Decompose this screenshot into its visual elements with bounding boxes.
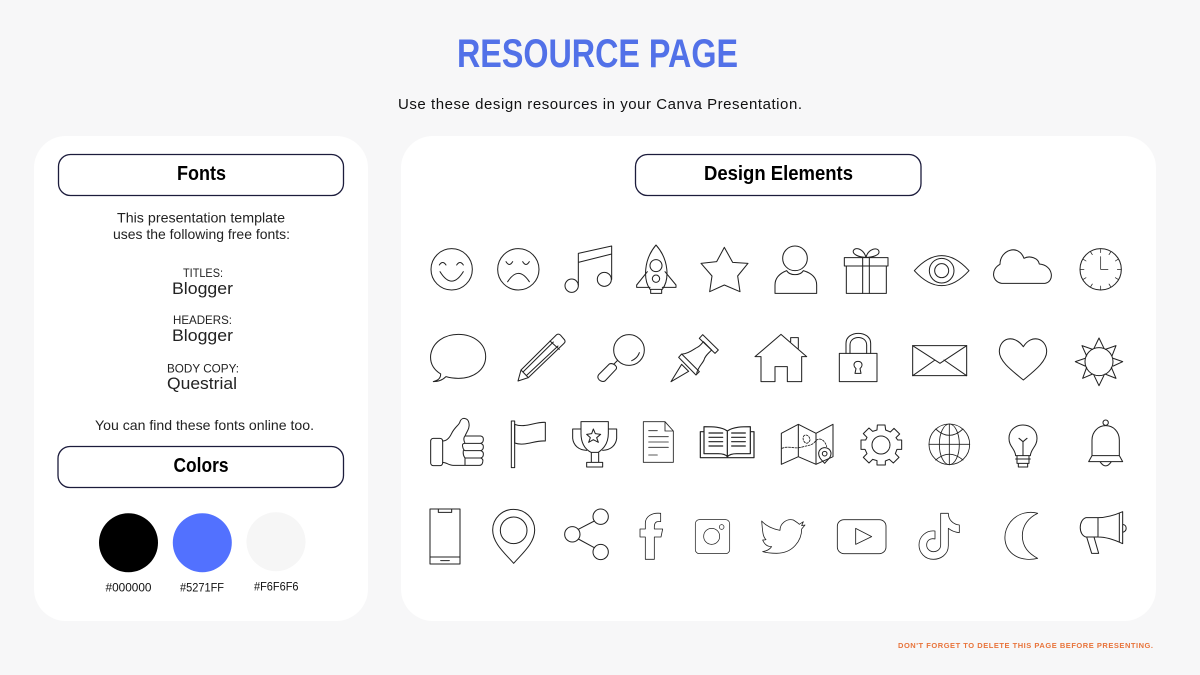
icon: pencil	[518, 334, 565, 381]
icon row 1 right	[755, 246, 1123, 386]
text: titles font: Blogger	[172, 279, 233, 298]
icon: map	[781, 424, 833, 464]
swatch: black	[99, 513, 158, 595]
icon: tiktok	[919, 513, 959, 559]
text: body font: BODY COPY:	[167, 362, 239, 376]
swatch: blue	[173, 513, 232, 595]
swatch: light grey	[246, 512, 306, 594]
icon: star	[701, 247, 748, 292]
icon: globe	[929, 424, 970, 465]
swatch: blue: #5271FF	[180, 581, 224, 595]
icon: open book	[700, 427, 754, 458]
icon: clock	[1080, 249, 1121, 290]
icon row 1 left	[431, 245, 748, 382]
icon: gift	[844, 249, 888, 293]
heading: design elements	[636, 154, 921, 196]
text: font intro: This presentation template	[117, 210, 285, 226]
icon: smile	[431, 249, 472, 290]
icon: phone	[430, 509, 460, 564]
icon: instagram	[695, 520, 730, 554]
text: font intro	[113, 210, 290, 242]
icon: location pin	[493, 509, 535, 563]
swatch: light grey: #F6F6F6	[254, 580, 299, 594]
icon: sun	[1075, 338, 1123, 386]
text: fonts note: You can find these fonts online too.	[95, 417, 314, 433]
icon: crescent moon	[1005, 512, 1038, 559]
icon: eye	[914, 256, 969, 286]
text: headers font: Blogger	[172, 326, 233, 345]
heading: colors	[58, 446, 344, 488]
icon row 2 and 3 left	[430, 418, 754, 564]
icon: person	[775, 246, 817, 293]
panel: design elements	[401, 136, 1156, 621]
text: font intro: uses the following free fonts:	[113, 226, 290, 242]
icon: megaphone	[1080, 512, 1126, 553]
icon: magnifier	[598, 335, 644, 382]
icon: document	[643, 422, 673, 462]
icon: heart	[999, 339, 1047, 380]
icon: trophy	[573, 422, 617, 467]
heading: fonts: Fonts	[177, 163, 226, 185]
icon: gear	[861, 425, 902, 465]
icon: twitter bird	[762, 520, 805, 553]
icon: share	[565, 509, 608, 560]
text: titles font	[172, 266, 233, 298]
icon: rocket	[637, 245, 676, 293]
icon row 2 and 3 right	[762, 420, 1126, 559]
text: body font: Questrial	[167, 374, 237, 393]
icon: house	[755, 334, 807, 382]
text: headers font	[172, 313, 233, 345]
footer note: DON'T FORGET TO DELETE THIS PAGE BEFORE PRESENTING.	[898, 641, 1153, 650]
text: titles font: TITLES:	[183, 266, 223, 280]
icon: video play	[837, 520, 886, 554]
icon: light bulb	[1009, 425, 1037, 467]
icon: padlock	[839, 333, 877, 382]
title: RESOURCE PAGE	[457, 32, 738, 76]
text: body font	[167, 362, 239, 393]
icon: push pin	[671, 335, 718, 382]
icon: music note	[565, 246, 612, 292]
icon: bell	[1089, 420, 1123, 466]
icon: facebook	[640, 513, 663, 559]
text: headers font: HEADERS:	[173, 313, 232, 327]
icon: flag	[511, 421, 545, 468]
icon: thumbs up	[431, 418, 483, 466]
heading: fonts	[58, 154, 344, 196]
icon: sad face	[498, 249, 539, 290]
panel: fonts and colors	[34, 136, 368, 621]
heading: design elements: Design Elements	[704, 163, 853, 185]
icon: envelope	[913, 346, 967, 376]
heading: colors: Colors	[174, 455, 228, 477]
icon: cloud	[994, 250, 1051, 283]
subtitle: Use these design resources in your Canva Presentation.	[398, 96, 802, 113]
icon: speech bubble	[431, 334, 486, 382]
swatch: black: #000000	[106, 581, 152, 595]
